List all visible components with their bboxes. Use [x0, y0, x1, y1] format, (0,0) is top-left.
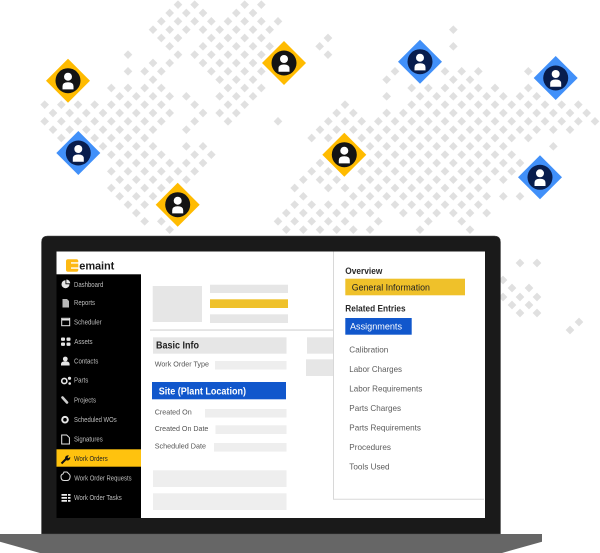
form: basic info: Work Order Type — [155, 360, 209, 368]
related entries panel: Assignments — [350, 322, 402, 332]
related entries panel: Overview — [345, 266, 383, 276]
related entries panel: Calibration — [349, 344, 389, 354]
related entries panel: Parts Charges — [349, 403, 401, 413]
nav: dashboard: Dashboard — [74, 282, 103, 289]
nav: projects — [62, 398, 96, 404]
nav: scheduled work orders — [62, 417, 117, 424]
pin: yellow user 4 — [322, 133, 366, 177]
nav: work order tasks — [62, 494, 122, 502]
related entries panel: Procedures — [349, 442, 391, 452]
pin: blue user 4 — [518, 155, 562, 199]
laptop lid — [42, 236, 500, 534]
nav: parts — [62, 377, 89, 385]
related entries panel: Labor Requirements — [349, 384, 422, 394]
work order header placeholders — [153, 285, 288, 323]
pin: blue user 2 — [398, 40, 442, 84]
screen — [56, 252, 485, 518]
empty form rows — [153, 470, 286, 510]
nav: assets: Assets — [74, 339, 93, 346]
nav: signatures: Signatures — [74, 436, 103, 444]
nav: signatures — [62, 435, 103, 444]
pin: blue user 3 — [534, 56, 578, 100]
pin: yellow user 1 — [46, 59, 90, 103]
form: site plant location: Scheduled Date — [155, 442, 206, 450]
related entries panel: Parts Requirements — [349, 422, 421, 432]
form: basic info: Basic Info — [156, 340, 199, 352]
pin: yellow user 2 — [156, 183, 200, 227]
form: site plant location: Site (Plant Location) — [159, 386, 246, 398]
logo: emaint — [79, 260, 115, 272]
dotted world map — [45, 5, 595, 330]
form: site plant location — [152, 382, 286, 452]
related entries panel: General Information — [352, 282, 430, 292]
nav: work order tasks: Work Order Tasks — [74, 495, 122, 502]
related entries panel: Labor Charges — [349, 364, 402, 374]
nav: dashboard — [62, 280, 103, 289]
nav: work orders active: Work Orders — [74, 456, 108, 463]
nav: contacts — [61, 357, 99, 366]
related entries panel — [334, 252, 484, 499]
form: site plant location: Created On — [155, 408, 192, 416]
nav: scheduler: Scheduler — [74, 320, 102, 326]
nav: reports: Reports — [74, 300, 95, 307]
laptop — [0, 236, 542, 553]
nav: parts: Parts — [74, 378, 89, 384]
form: site plant location: Created On Date — [155, 424, 208, 433]
form: basic info — [153, 337, 286, 370]
sidebar navigation — [56, 274, 141, 518]
laptop base — [0, 534, 542, 553]
related entries panel: Related Entries — [345, 304, 406, 314]
second column placeholders — [306, 337, 333, 376]
nav: work order requests: Work Order Requests — [74, 476, 132, 482]
nav: scheduler — [62, 318, 102, 326]
nav: contacts: Contacts — [74, 358, 99, 366]
pin: yellow user 3 — [262, 41, 306, 85]
logo — [66, 259, 115, 272]
related entries panel: Tools Used — [349, 462, 390, 472]
nav: work orders active — [56, 449, 141, 467]
nav: projects: Projects — [74, 398, 96, 404]
nav: reports — [62, 299, 95, 308]
nav: scheduled work orders: Scheduled WOs — [74, 417, 117, 424]
pin: blue user 1 — [56, 131, 100, 175]
nav: work order requests — [61, 472, 132, 482]
nav: assets — [61, 338, 93, 346]
